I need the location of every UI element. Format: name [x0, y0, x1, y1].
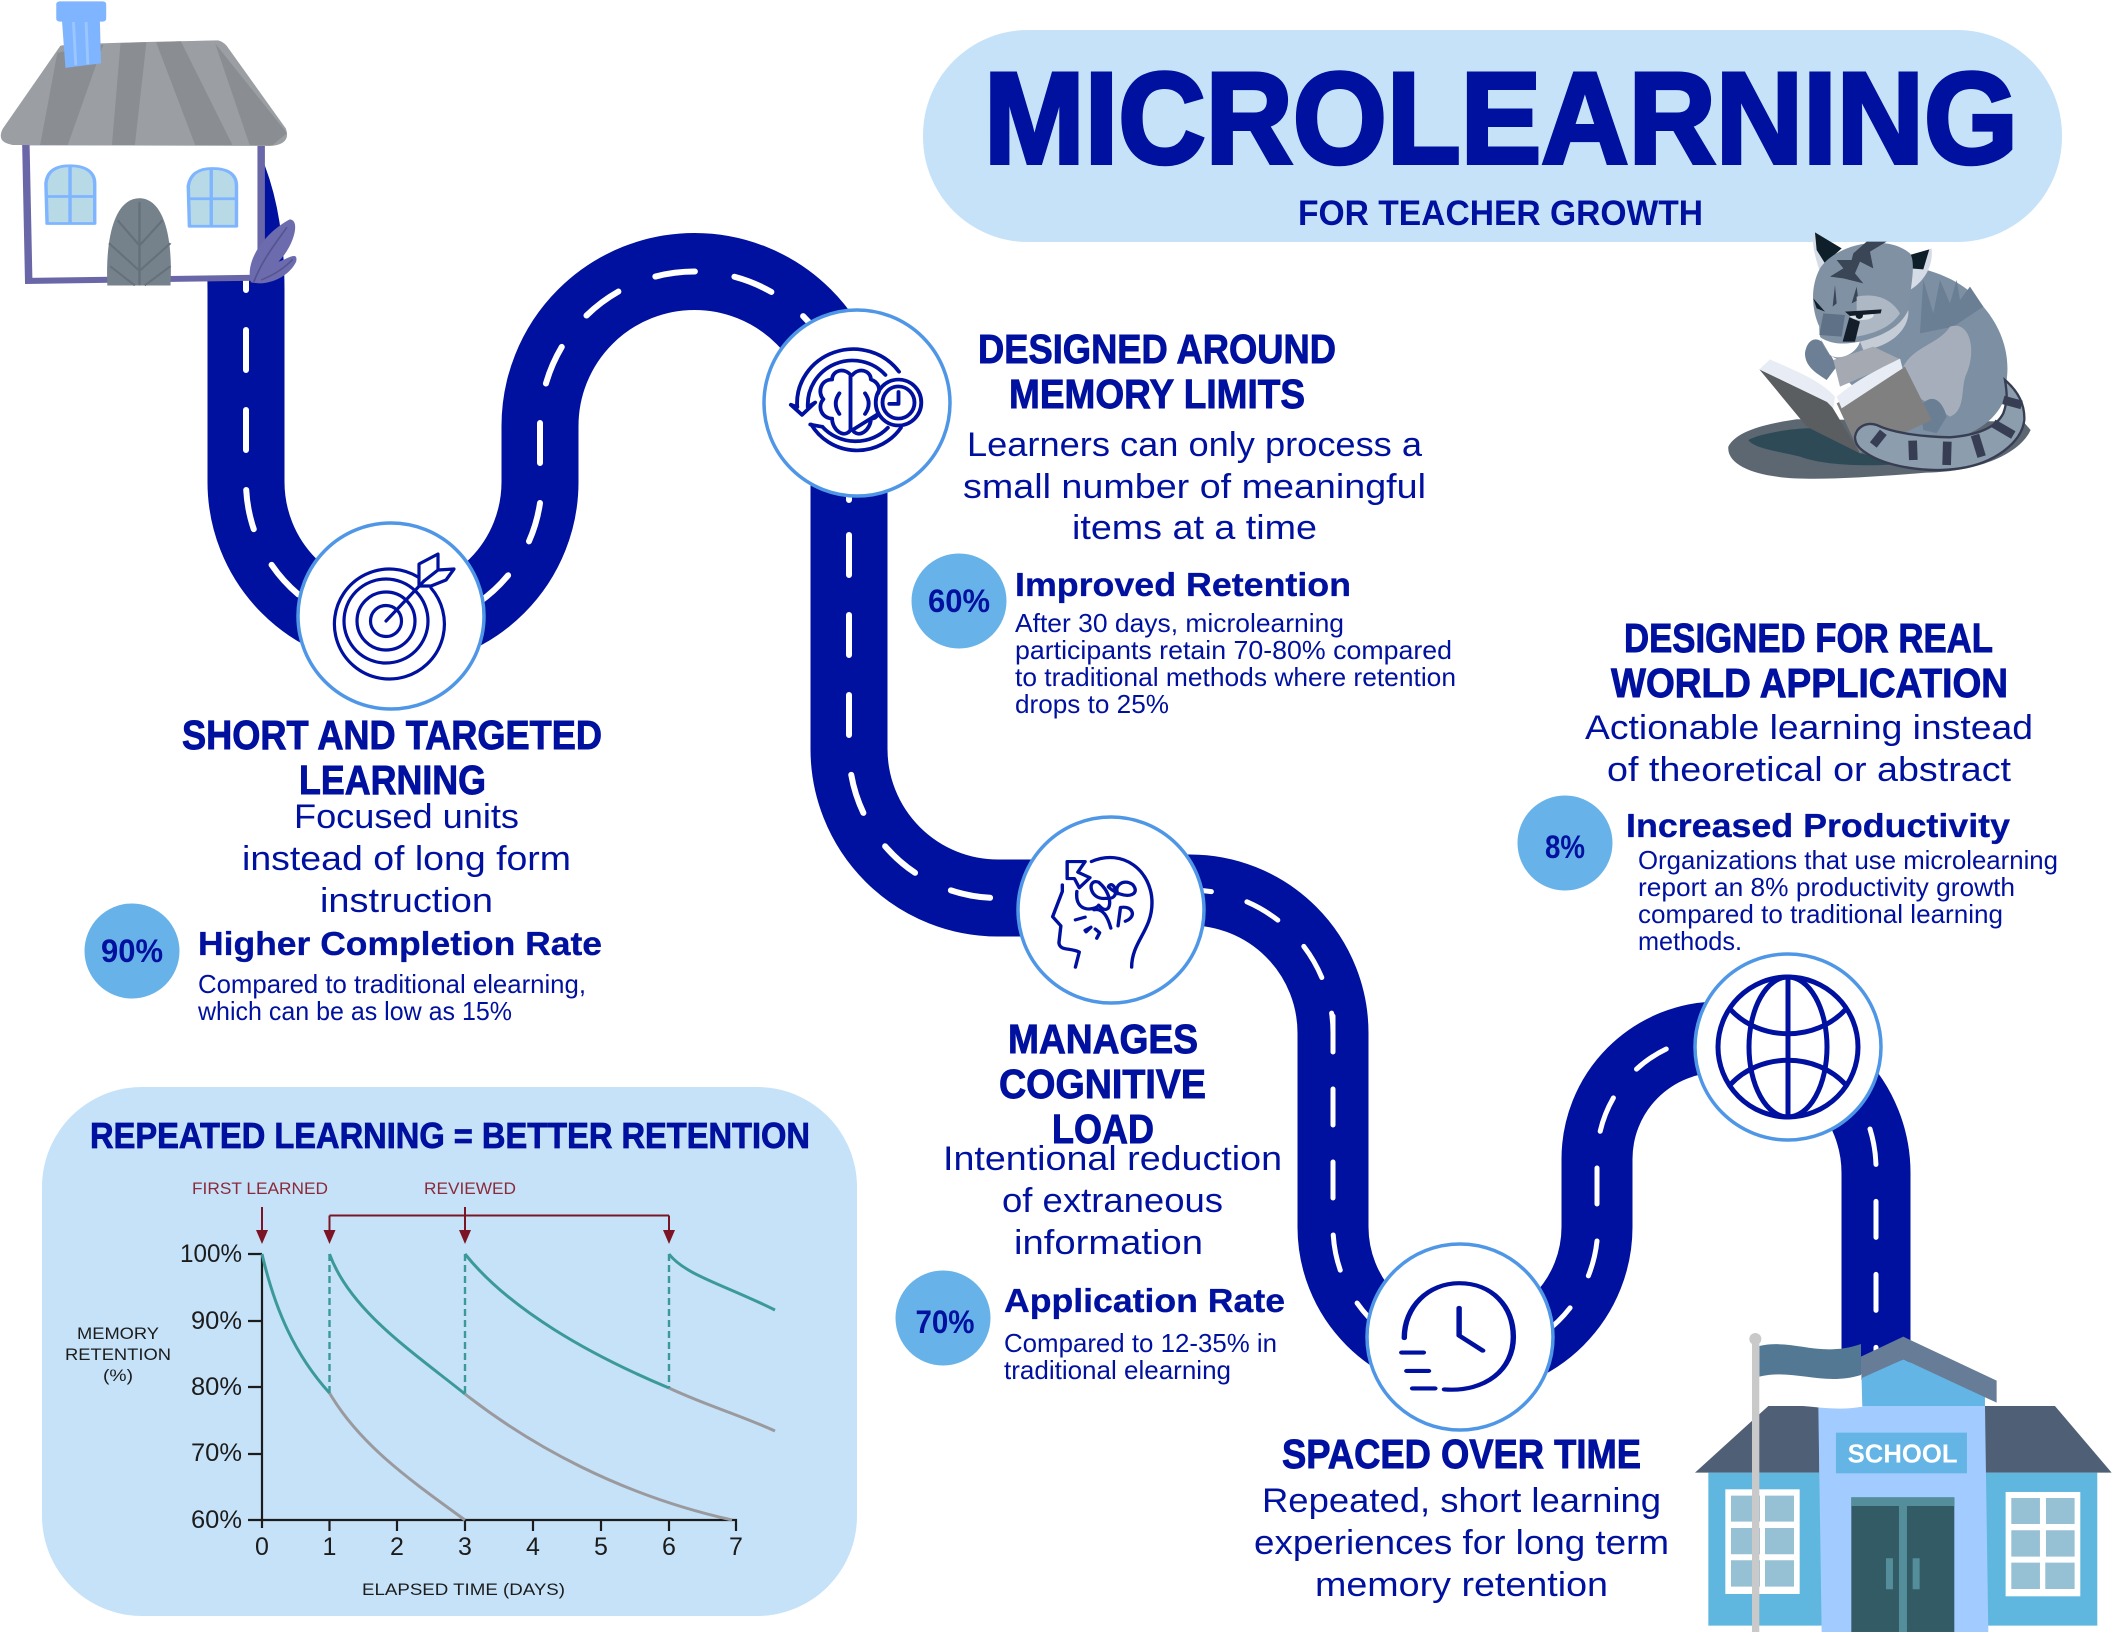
y axis labels: [180, 1240, 242, 1534]
description: instruction: [320, 882, 493, 920]
forgetting curves without review: [330, 1388, 775, 1520]
heading: LOAD: [1052, 1106, 1154, 1152]
stat: application rate: Compared to 12-35% in: [1004, 1328, 1277, 1358]
section: designed for real world application: [1518, 615, 2058, 956]
x axis labels: 4: [526, 1533, 540, 1561]
stat badge: 70%: 70%: [916, 1304, 974, 1340]
stat: improved retention: to traditional methods where retention: [1015, 662, 1456, 692]
heading: SPACED OVER TIME: [1282, 1431, 1641, 1477]
y axis labels: 60%: [191, 1506, 242, 1534]
x axis labels: 7: [729, 1533, 743, 1561]
title banner: [923, 30, 2062, 242]
stat: higher completion rate: [197, 925, 602, 1026]
heading: [1611, 615, 2008, 706]
stat badge: 90%: [84, 904, 180, 998]
heading: DESIGNED FOR REAL: [1624, 615, 1993, 661]
school sign: SCHOOL: [1848, 1438, 1958, 1468]
retention curves with review: [262, 1254, 775, 1394]
x axis labels: [255, 1533, 743, 1561]
review labels and arrows: [192, 1179, 675, 1244]
stat: improved retention: participants retain 70-80% compared: [1015, 635, 1452, 665]
stat: improved retention: After 30 days, microlearning: [1015, 608, 1344, 638]
icon circle: clock spacing: [1367, 1244, 1553, 1430]
description: Focused units: [294, 798, 519, 836]
description: of extraneous: [1002, 1182, 1223, 1220]
description: Actionable learning instead: [1585, 709, 2033, 747]
stat: application rate: traditional elearning: [1004, 1355, 1231, 1385]
description: [242, 798, 571, 920]
y axis labels: 80%: [191, 1373, 242, 1401]
description: information: [1014, 1224, 1203, 1262]
stat: increased productivity: Increased Productivity: [1626, 807, 2011, 844]
icon circle: target: [298, 523, 484, 709]
y axis title: [65, 1324, 171, 1385]
description: Learners can only process a: [967, 426, 1422, 464]
description: of theoretical or abstract: [1607, 751, 2012, 789]
heading: MEMORY LIMITS: [1009, 371, 1305, 417]
chart title: REPEATED LEARNING = BETTER RETENTION: [90, 1115, 810, 1156]
stat: increased productivity: [1626, 807, 2058, 956]
stat: higher completion rate: Compared to traditional elearning,: [198, 969, 586, 999]
x axis labels: 5: [594, 1533, 608, 1561]
section: manages cognitive load: [896, 1016, 1285, 1385]
stat badge: 90%: 90%: [101, 933, 163, 969]
stat badge: 8%: 8%: [1545, 829, 1585, 865]
y axis title: RETENTION: [65, 1345, 171, 1364]
heading: [182, 712, 602, 803]
icon circle: brain with memory clock: [764, 310, 950, 496]
heading: LEARNING: [299, 757, 486, 803]
stat: higher completion rate: which can be as low as 15%: [197, 996, 512, 1026]
flag and pole: [1749, 1333, 1862, 1632]
x axis labels: 1: [323, 1533, 336, 1561]
heading: MANAGES: [1008, 1016, 1198, 1062]
heading: [978, 326, 1336, 417]
section: designed around memory limits: [912, 326, 1456, 719]
description: items at a time: [1072, 509, 1317, 547]
stat: higher completion rate: Higher Completion Rate: [198, 925, 602, 962]
subtitle: FOR TEACHER GROWTH: [1298, 194, 1703, 233]
x axis labels: 6: [662, 1533, 676, 1561]
axes: [248, 1254, 736, 1531]
description: small number of meaningful: [963, 468, 1426, 506]
house walls: [26, 142, 261, 281]
description: [1254, 1482, 1669, 1604]
section: short and targeted learning: [84, 712, 602, 1026]
description: [1585, 709, 2033, 789]
description: memory retention: [1315, 1566, 1608, 1604]
icon circle: globe: [1695, 954, 1881, 1140]
stat: increased productivity: report an 8% productivity growth: [1638, 872, 2015, 902]
stat badge: 60%: 60%: [928, 583, 990, 619]
icon: house at start of road: [1, 1, 296, 285]
review labels and arrows: FIRST LEARNED: [192, 1179, 328, 1198]
heading: WORLD APPLICATION: [1611, 660, 2008, 706]
stat badge: 70%: [896, 1270, 990, 1366]
y axis labels: 70%: [191, 1439, 242, 1467]
illustration: school building: [1695, 1333, 2112, 1632]
description: [943, 1140, 1282, 1262]
heading: SHORT AND TARGETED: [182, 712, 602, 758]
stat: improved retention: Improved Retention: [1015, 566, 1351, 603]
y axis title: (%): [103, 1366, 133, 1385]
y axis labels: 90%: [191, 1307, 242, 1335]
stat: improved retention: [1015, 566, 1456, 719]
section: spaced over time: [1254, 1431, 1669, 1604]
description: experiences for long term: [1254, 1524, 1669, 1562]
heading: [999, 1016, 1206, 1152]
school sign: [1836, 1433, 1967, 1473]
description: instead of long form: [242, 840, 571, 878]
stat: increased productivity: Organizations that use microlearning: [1638, 845, 2058, 875]
x axis labels: 3: [458, 1533, 472, 1561]
retention line chart: [65, 1179, 775, 1599]
description: [963, 426, 1426, 547]
review labels and arrows: REVIEWED: [424, 1179, 516, 1198]
x axis labels: 0: [255, 1533, 269, 1561]
icon circle: head with cognitive load: [1018, 817, 1204, 1003]
stat badge: 8%: [1518, 796, 1612, 890]
stat: application rate: [1004, 1282, 1285, 1385]
x axis title: ELAPSED TIME (DAYS): [362, 1580, 565, 1599]
stat: increased productivity: methods.: [1638, 926, 1742, 956]
stat: application rate: Application Rate: [1004, 1282, 1285, 1319]
description: Intentional reduction: [943, 1140, 1282, 1178]
x axis labels: 2: [390, 1533, 404, 1561]
stat: increased productivity: compared to traditional learning: [1638, 899, 2003, 929]
description: Repeated, short learning: [1262, 1482, 1661, 1520]
illustration: tiger cat reading a book: [1728, 232, 2031, 479]
heading: DESIGNED AROUND: [978, 326, 1336, 372]
title: microlearning: MICROLEARNING: [984, 45, 2018, 191]
heading: COGNITIVE: [999, 1061, 1206, 1107]
y axis title: MEMORY: [77, 1324, 159, 1343]
panel: repeated learning chart: [42, 1087, 857, 1616]
road: winding path from home to school: [200, 130, 1876, 1380]
y axis labels: 100%: [180, 1240, 242, 1268]
stat badge: 60%: [912, 554, 1006, 648]
stat: improved retention: drops to 25%: [1015, 689, 1169, 719]
